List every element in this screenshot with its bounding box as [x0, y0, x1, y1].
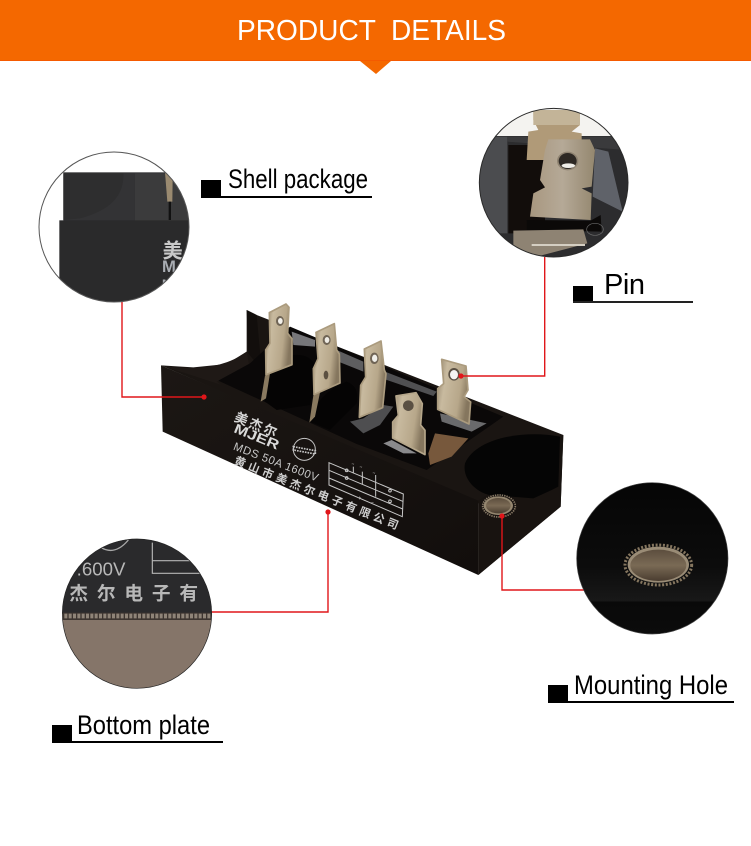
pin 2 [309, 324, 340, 423]
certification logo [293, 438, 315, 460]
detail circle: shell package: 美 [163, 239, 183, 262]
pin 1 [261, 304, 292, 402]
detail circle: mounting hole [573, 480, 733, 637]
label: shell package [201, 164, 372, 198]
detail circle: pin [477, 107, 633, 259]
title: PRODUCT DETAILS [237, 15, 506, 47]
label: mounting hole: Mounting Hole [574, 670, 728, 700]
circuit diagram [329, 461, 403, 517]
terminal pins [261, 304, 471, 455]
circuit diagram: + [357, 495, 361, 502]
model: MDS 50A 1600V [232, 441, 320, 485]
detail circle: shell package: M [162, 257, 176, 276]
detail circle: bottom plate: 杰尔电子有 [69, 583, 198, 604]
connector: pin [458, 257, 545, 379]
circuit diagram: ~ [372, 470, 375, 476]
printed marking [232, 409, 401, 532]
chinese brand: 美杰尔 [232, 409, 280, 440]
brand MJER: MJER [232, 421, 282, 453]
detail circle: bottom plate [60, 537, 217, 690]
header banner [0, 0, 751, 74]
label: bottom plate: Bottom plate [77, 710, 210, 740]
circuit diagram: − [370, 500, 374, 507]
label: pin: Pin [604, 269, 645, 301]
label: shell package: Shell package [228, 164, 368, 194]
circuit diagram: ~ [359, 465, 362, 471]
resin cavity [218, 327, 503, 470]
detail circle: bottom plate: .600V [77, 559, 126, 580]
detail circle: shell package [39, 152, 190, 304]
mounting hole [483, 495, 515, 517]
connector: bottom plate [211, 509, 331, 612]
pin 5 [438, 359, 471, 424]
pin 3 [359, 341, 386, 417]
connector: mounting hole [499, 513, 584, 590]
detail circle: shell package: M [162, 277, 173, 291]
module body [161, 310, 563, 575]
company: 黄山市美杰尔电子有限公司 [232, 453, 401, 532]
circuit diagram: ~ [351, 461, 354, 467]
label: pin [573, 269, 693, 303]
product photo: rectifier module [161, 304, 563, 575]
connector: shell package [122, 302, 207, 400]
pin 4 [393, 393, 425, 455]
